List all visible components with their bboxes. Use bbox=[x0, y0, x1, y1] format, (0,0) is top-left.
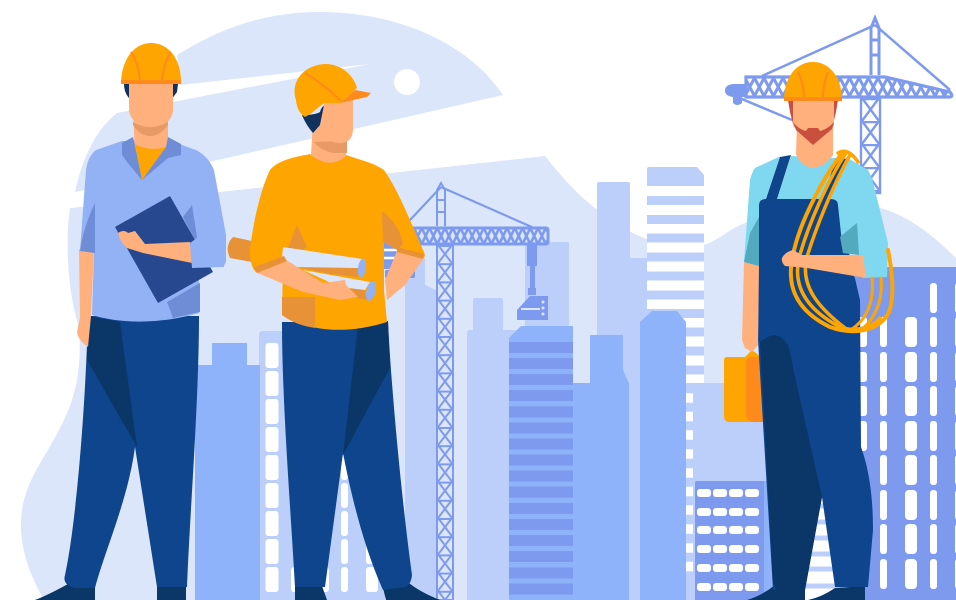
crane top mast bbox=[437, 183, 445, 226]
small stripe tower between legs bbox=[803, 480, 843, 600]
cuff bbox=[397, 247, 424, 259]
crane load block bbox=[517, 296, 548, 320]
helmet bbox=[121, 43, 181, 84]
trouser shade bbox=[760, 335, 822, 590]
neck bbox=[796, 125, 833, 168]
background blob: main body bbox=[21, 156, 956, 600]
neck bbox=[311, 120, 347, 163]
collar bbox=[122, 137, 181, 180]
hair bbox=[302, 102, 332, 133]
building behind crane hoist bbox=[525, 242, 569, 342]
shirt chest bbox=[777, 156, 837, 199]
worker 2: man with plans bbox=[228, 64, 440, 600]
carrying arm bbox=[255, 258, 358, 300]
trousers bbox=[64, 316, 199, 588]
building left of crane bbox=[405, 258, 438, 600]
worker 1: clipboard man bbox=[35, 43, 226, 600]
tall building with step bbox=[597, 182, 647, 600]
helmet bbox=[784, 62, 842, 101]
right windowed building bbox=[855, 267, 956, 600]
crane: central tower crane bbox=[383, 183, 548, 600]
toolbox bbox=[724, 350, 765, 422]
lower shirt shade bbox=[167, 283, 200, 318]
hip arm bbox=[385, 251, 424, 300]
worker 3: man with rope and toolbox bbox=[724, 62, 892, 600]
crane jib bbox=[383, 228, 548, 244]
boots bbox=[295, 583, 440, 600]
helmet bbox=[295, 64, 371, 117]
right sleeve shade bbox=[840, 223, 859, 255]
rear scroll end bbox=[228, 237, 252, 262]
inner arm shade bbox=[382, 211, 403, 250]
pale building by toolbox bbox=[693, 383, 780, 600]
side hair bbox=[788, 100, 838, 124]
windowed building behind second worker bbox=[259, 331, 385, 600]
striped strip right of tower bbox=[686, 383, 694, 600]
white sun circle bbox=[394, 69, 420, 95]
shirt shade bbox=[282, 225, 315, 328]
crane counterweight bbox=[383, 243, 415, 278]
shirt bbox=[250, 154, 425, 330]
windowed block bbox=[695, 481, 764, 600]
trouser shade bbox=[343, 321, 390, 455]
blue stepped building bbox=[573, 335, 629, 600]
trousers bbox=[282, 322, 412, 590]
shirt bbox=[80, 140, 226, 322]
crane mast bbox=[437, 245, 453, 600]
orange undershirt bbox=[135, 144, 166, 180]
left sleeve shade bbox=[80, 203, 95, 253]
crane hoist bbox=[527, 245, 537, 295]
clipboard bbox=[115, 196, 213, 303]
left arm bbox=[742, 262, 759, 352]
trouser shade bbox=[87, 316, 137, 447]
building with stripes bbox=[509, 326, 573, 600]
strip building bbox=[760, 481, 780, 600]
hanging arm bbox=[77, 249, 94, 347]
crane cables bbox=[395, 187, 534, 236]
striped white tower bbox=[647, 167, 704, 600]
neck bbox=[133, 110, 168, 152]
medium building left bbox=[195, 343, 260, 600]
holding arm bbox=[782, 250, 866, 278]
skyline back row bbox=[195, 167, 843, 600]
face bbox=[129, 84, 173, 126]
shirt left bbox=[744, 156, 781, 266]
neck shadow bbox=[133, 122, 168, 136]
rope coil bbox=[791, 151, 892, 331]
left sleeve shade bbox=[744, 217, 759, 266]
shirt right and sleeve bbox=[830, 157, 888, 278]
sleeve shade over clipboard bbox=[183, 205, 197, 240]
holding arm bbox=[118, 231, 192, 263]
hair bbox=[124, 84, 178, 100]
face bbox=[320, 100, 353, 143]
right sleeve cuff bbox=[190, 190, 226, 268]
neck shadow bbox=[314, 141, 347, 153]
building with roof tower bbox=[467, 298, 525, 600]
overall straps bbox=[766, 155, 846, 199]
sleeve cuff bbox=[254, 256, 287, 273]
beard bbox=[793, 122, 834, 145]
boots bbox=[747, 585, 865, 600]
plan rolls bbox=[282, 247, 378, 302]
boots bbox=[35, 584, 186, 600]
skyline front row bbox=[509, 18, 956, 600]
background blob: top arc bbox=[75, 12, 503, 192]
blue chamfered tower bbox=[640, 311, 686, 600]
face bbox=[793, 100, 834, 145]
crane: right tower crane bbox=[725, 18, 952, 193]
trousers bbox=[758, 199, 873, 590]
